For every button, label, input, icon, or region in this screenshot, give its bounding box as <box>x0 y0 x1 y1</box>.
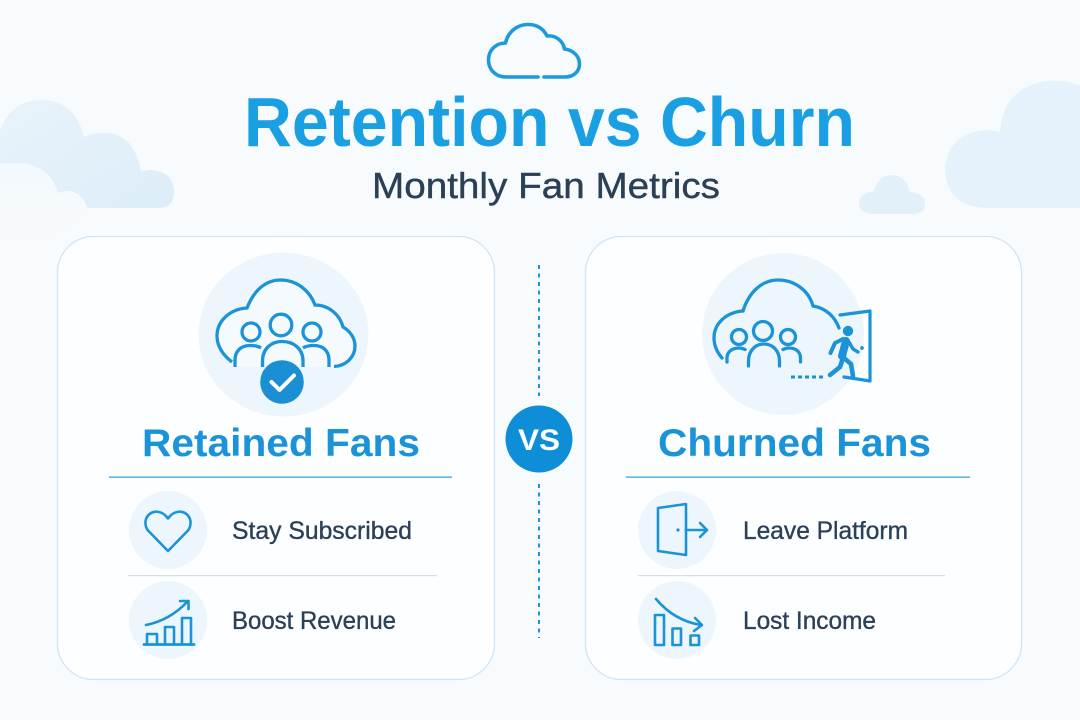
icon: retained fans cloud with check <box>198 252 368 416</box>
icon: heart <box>129 491 207 569</box>
icon: rising bar chart <box>129 581 207 659</box>
panel: churned fans <box>586 236 1022 680</box>
badge: vs <box>506 406 572 472</box>
background cloud: right large <box>945 81 1080 208</box>
background cloud: right small <box>859 175 925 214</box>
icon: exit door <box>638 491 716 569</box>
background cloud: left <box>0 100 174 208</box>
label: boost revenue: Boost Revenue <box>232 607 396 635</box>
heading: retained fans: Retained Fans <box>142 422 420 465</box>
badge: vs: VS <box>518 424 560 457</box>
heading: churned fans: Churned Fans <box>658 422 931 465</box>
icon: churned fans cloud with exit door <box>702 253 870 415</box>
label: lost income: Lost Income <box>743 607 876 635</box>
divider: dotted vertical line <box>538 265 540 638</box>
icon: cloud above title <box>488 24 580 77</box>
icon: falling bar chart <box>638 581 716 659</box>
title: Retention vs Churn <box>244 83 855 161</box>
subtitle: Monthly Fan Metrics <box>372 165 720 206</box>
label: stay subscribed: Stay Subscribed <box>232 517 412 545</box>
panel: retained fans <box>58 236 494 680</box>
label: leave platform: Leave Platform <box>743 517 908 545</box>
